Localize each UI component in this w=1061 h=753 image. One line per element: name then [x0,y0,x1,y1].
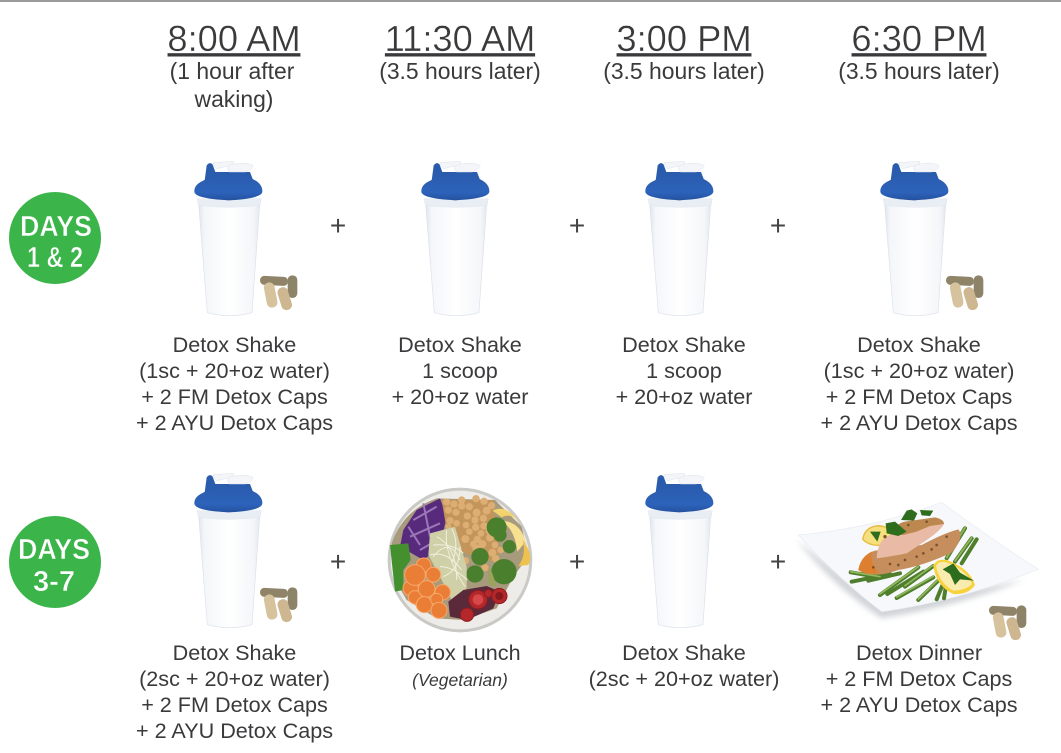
text: day 1-2 afternoon: 1 scoop [646,358,722,383]
column heading: 11:30 AM: (3.5 hours later) [379,58,541,84]
column heading: 6:30 PM: (3.5 hours later) [838,58,1000,84]
column heading: 3:00 PM [603,18,765,84]
text: day 1-2 evening [820,332,1018,435]
text: day 3-7 afternoon [589,640,779,691]
text: day 1-2 evening: (1sc + 20+oz water) [824,358,1014,383]
column heading: 11:30 AM: 11:30 AM [385,18,535,59]
text: day 3-7 morning: (2sc + 20+oz water) [139,666,330,691]
text: day 3-7 midday: (Vegetarian) [412,670,508,690]
text: day 3-7 evening: + 2 FM Detox Caps [826,666,1013,691]
plus signs row 2: + [770,546,786,577]
text: day 1-2 midday: + 20+oz water [392,384,528,409]
text: day 1-2 morning [136,332,333,435]
plus signs row 1: + [569,210,585,241]
badge: days 1 & 2 [9,192,101,284]
text: day 1-2 midday: 1 scoop [422,358,498,383]
top rule [0,0,1061,2]
text: day 3-7 evening: + 2 AYU Detox Caps [820,692,1018,717]
text: day 1-2 evening: Detox Shake [857,332,981,357]
column heading: 6:30 PM [838,18,1000,84]
plus signs row 2 [330,546,786,577]
column heading: 3:00 PM: (3.5 hours later) [603,58,765,84]
text: day 3-7 afternoon: (2sc + 20+oz water) [589,666,779,691]
column heading: 3:00 PM: 3:00 PM [616,18,752,59]
text: day 1-2 morning: Detox Shake [173,332,296,357]
text: day 3-7 midday: Detox Lunch [399,640,521,665]
text: day 3-7 morning: + 2 AYU Detox Caps [136,718,333,743]
text: day 1-2 morning: + 2 AYU Detox Caps [136,410,333,435]
plus signs row 1 [330,210,786,241]
badge: days 3-7: DAYS [18,534,90,566]
icon: shaker with capsules, day 1-2 morning [194,161,297,316]
column heading: 8:00 AM: waking) [194,86,273,112]
text: day 1-2 morning: (1sc + 20+oz water) [139,358,330,383]
text: day 1-2 evening: + 2 AYU Detox Caps [820,410,1018,435]
text: day 1-2 morning: + 2 FM Detox Caps [141,384,328,409]
plus signs row 2: + [330,546,346,577]
icon: salmon dinner plate with capsules [797,502,1038,641]
icon: vegetarian lunch bowl [388,488,532,632]
icon: shaker with capsules, day 3-7 morning [194,473,297,628]
text: day 3-7 evening [820,640,1018,717]
plus signs row 1: + [770,210,786,241]
text: day 3-7 morning [136,640,333,743]
plus signs row 1: + [330,210,346,241]
text: day 1-2 evening: + 2 FM Detox Caps [826,384,1013,409]
text: day 1-2 afternoon [616,332,752,409]
text: day 1-2 afternoon: + 20+oz water [616,384,752,409]
icon: shaker, day 1-2 afternoon [645,161,713,316]
badge: days 3-7: 3-7 [33,566,75,598]
text: day 3-7 morning: Detox Shake [173,640,296,665]
icon: shaker, day 3-7 afternoon [645,473,713,628]
column heading: 8:00 AM: 8:00 AM [167,18,301,59]
text: day 1-2 midday: Detox Shake [398,332,522,357]
badge: days 1 & 2: DAYS [20,211,92,243]
text: day 3-7 evening: Detox Dinner [856,640,982,665]
text: day 3-7 midday [399,640,521,690]
column heading: 6:30 PM: 6:30 PM [851,18,987,59]
text: day 3-7 morning: + 2 FM Detox Caps [141,692,328,717]
icon: shaker, day 1-2 midday [421,161,489,316]
badge: days 1 & 2: 1 & 2 [27,242,83,274]
plus signs row 2: + [569,546,585,577]
icon: shaker with capsules, day 1-2 evening [880,161,983,316]
column heading: 8:00 AM [167,18,301,112]
badge: days 3-7 [9,516,101,608]
column heading: 11:30 AM [379,18,541,84]
text: day 1-2 midday [392,332,528,409]
text: day 1-2 afternoon: Detox Shake [622,332,746,357]
text: day 3-7 afternoon: Detox Shake [622,640,746,665]
column heading: 8:00 AM: (1 hour after [170,58,295,84]
